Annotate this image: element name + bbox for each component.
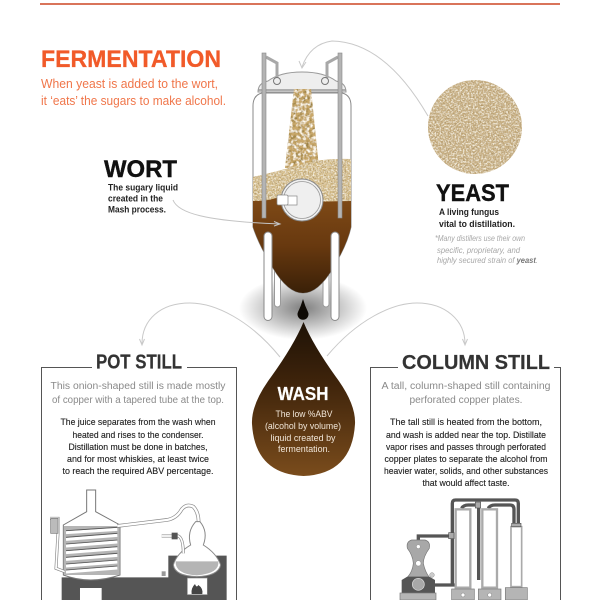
wash description: The low %ABV bbox=[276, 409, 333, 419]
wash heading: WASH bbox=[278, 384, 328, 404]
column still summary: A tall, column-shaped still containing bbox=[382, 381, 550, 392]
intro text: When yeast is added to the wort, bbox=[41, 76, 218, 91]
arrow: yeast to tank bbox=[299, 41, 428, 116]
pot still details: heated and rises to the condenser. bbox=[72, 430, 204, 440]
pot still details: to reach the required ABV percentage. bbox=[62, 466, 214, 476]
pot still diagram bbox=[50, 490, 227, 600]
wash description: liquid created by bbox=[270, 433, 336, 443]
yeast label bbox=[435, 180, 538, 265]
yeast footnote bbox=[435, 234, 538, 265]
wort liquid bbox=[253, 198, 351, 293]
column still details: heavier water, solids, and other substances bbox=[384, 466, 549, 476]
back legs bbox=[274, 262, 329, 307]
pot still details bbox=[60, 417, 216, 476]
wash description: fermentation. bbox=[278, 444, 330, 454]
pot still details: The juice separates from the wash when bbox=[60, 417, 216, 427]
yeast label: YEAST bbox=[436, 180, 509, 207]
wash description bbox=[265, 409, 341, 454]
fermentation tank bbox=[253, 53, 351, 320]
panel: pot still bbox=[42, 352, 236, 600]
column still diagram bbox=[400, 500, 527, 600]
pot still summary: This onion-shaped still is made mostly bbox=[50, 381, 226, 392]
wort label: Mash process. bbox=[108, 204, 166, 214]
pot still summary bbox=[50, 381, 226, 406]
shadow under tank bbox=[239, 276, 367, 340]
pot still details: Distillation must be done in batches, bbox=[68, 442, 208, 452]
column still details: that would affect taste. bbox=[422, 478, 510, 488]
column still summary bbox=[382, 381, 550, 406]
column still details: copper plates to separate the alcohol from bbox=[384, 454, 548, 464]
wort label: WORT bbox=[104, 156, 177, 183]
grain layer bbox=[253, 159, 351, 202]
pot still heading: POT STILL bbox=[96, 352, 182, 374]
intro text bbox=[41, 76, 226, 108]
panel: column still bbox=[370, 352, 560, 600]
yeast circle bbox=[428, 80, 522, 174]
column still details: The tall still is heated from the bottom, bbox=[390, 417, 542, 427]
pot still details: and for most whiskies, at least twice bbox=[67, 454, 209, 464]
title: FERMENTATION bbox=[41, 46, 221, 73]
top rule bbox=[40, 3, 560, 5]
arrow: wash to pot still bbox=[140, 303, 280, 357]
tank body bbox=[253, 93, 351, 293]
tank rods and handles bbox=[262, 53, 342, 218]
arrow: wash to column still bbox=[327, 303, 468, 356]
falling droplet bbox=[298, 299, 308, 320]
pot still summary: of copper with a tapered tube at the top. bbox=[52, 395, 224, 406]
wort label bbox=[104, 156, 178, 214]
column still heading: COLUMN STILL bbox=[402, 352, 550, 374]
yeast footnote: *Many distillers use their own bbox=[435, 234, 525, 243]
column still details: vapor rises and passes through perforated bbox=[386, 442, 546, 452]
wort label: The sugary liquid bbox=[108, 182, 178, 192]
front legs bbox=[264, 232, 339, 320]
falling yeast bbox=[285, 89, 319, 168]
wort label: created in the bbox=[108, 194, 163, 204]
yeast label: A living fungus bbox=[439, 207, 499, 217]
porthole bbox=[277, 179, 323, 221]
yeast footnote: highly secured strain of yeast. bbox=[437, 256, 538, 265]
yeast footnote: specific, proprietary, and bbox=[437, 246, 521, 255]
column still summary: perforated copper plates. bbox=[410, 395, 522, 406]
yeast label: vital to distillation. bbox=[439, 219, 515, 229]
intro text: it ‘eats’ the sugars to make alcohol. bbox=[41, 93, 226, 108]
arrow: wort to tank bbox=[173, 200, 280, 226]
wash description: (alcohol by volume) bbox=[265, 421, 341, 431]
column still details: and wash is added near the top. Distillate bbox=[386, 430, 546, 440]
column still details bbox=[384, 417, 549, 488]
wash drop bbox=[252, 322, 355, 476]
tank lid bbox=[258, 72, 346, 92]
